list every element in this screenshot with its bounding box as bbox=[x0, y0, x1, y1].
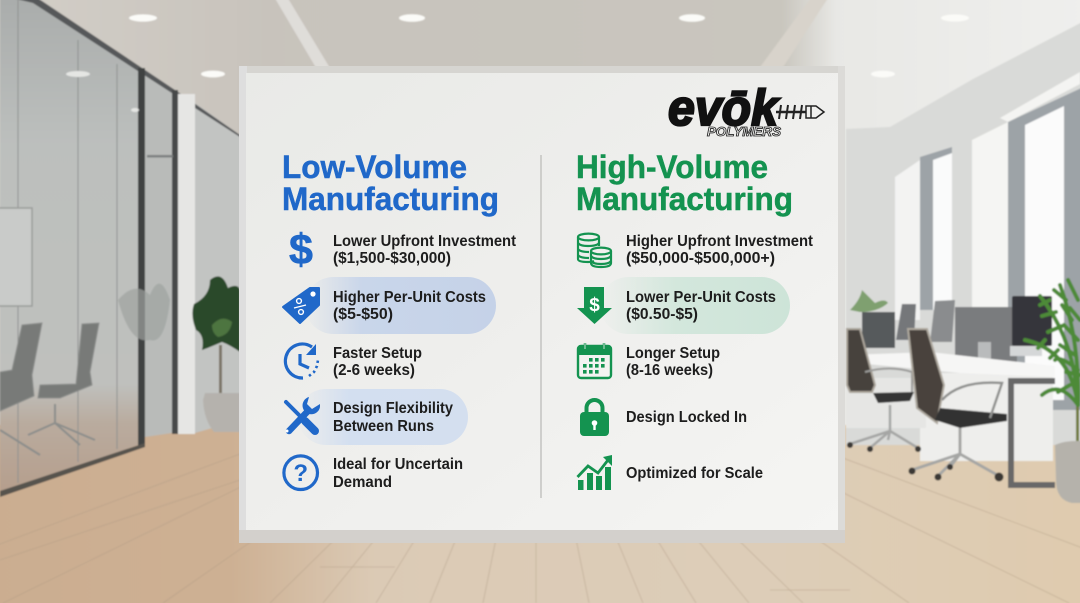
ceiling beams bbox=[273, 0, 830, 78]
floor plank lines bbox=[0, 440, 1080, 603]
left plant bbox=[192, 276, 240, 432]
item: lower upfront investment bbox=[289, 226, 516, 274]
item text: Longer Setup bbox=[626, 345, 720, 362]
highlight pill bbox=[305, 277, 496, 334]
icon: down arrow with dollar bbox=[577, 287, 612, 324]
board face bbox=[246, 73, 838, 530]
reflected plant bbox=[118, 284, 170, 340]
item text: Demand bbox=[333, 474, 392, 491]
ceiling lights bbox=[129, 14, 969, 77]
item text: Ideal for Uncertain bbox=[333, 456, 463, 473]
item: higher per-unit costs bbox=[283, 277, 496, 334]
item text: ($50,000-$500,000+) bbox=[626, 250, 775, 267]
heading: low-volume: Manufacturing bbox=[282, 181, 499, 217]
logo wordmark: evōk bbox=[668, 80, 780, 136]
logo: evok polymers bbox=[668, 80, 824, 139]
office chair near bbox=[908, 329, 1007, 482]
item: longer setup bbox=[578, 343, 720, 379]
highlight pill bbox=[600, 277, 790, 334]
office chair far bbox=[847, 329, 921, 452]
item text: (8-16 weeks) bbox=[626, 362, 713, 379]
icon: price tag bbox=[283, 288, 319, 323]
icon: question mark bbox=[284, 456, 318, 490]
item: higher upfront investment bbox=[578, 233, 813, 267]
item text: Faster Setup bbox=[333, 345, 422, 362]
icon: clock with arrow bbox=[285, 344, 318, 378]
desks and monitors bbox=[846, 296, 1055, 485]
item text: Lower Per-Unit Costs bbox=[626, 289, 776, 306]
item text: Design Locked In bbox=[626, 409, 747, 426]
item: ideal for uncertain demand bbox=[284, 456, 463, 491]
logo bolt bbox=[776, 105, 824, 119]
item text: Between Runs bbox=[333, 418, 434, 435]
highlight pill bbox=[298, 389, 468, 445]
heading: high-volume: High-Volume bbox=[576, 149, 768, 185]
icon: down arrow with dollar: $ bbox=[589, 295, 600, 316]
panel: high-volume manufacturing bbox=[576, 149, 813, 490]
column divider bbox=[540, 155, 542, 498]
item text: Lower Upfront Investment bbox=[333, 233, 516, 250]
panel: low-volume manufacturing bbox=[282, 149, 516, 491]
heading: high-volume: Manufacturing bbox=[576, 181, 793, 217]
right wall bbox=[846, 18, 1080, 445]
item: design locked in bbox=[580, 400, 747, 436]
icon: question mark: ? bbox=[293, 460, 308, 487]
icon: wrench and screwdriver bbox=[286, 397, 320, 432]
left glass wall bbox=[0, 0, 240, 497]
reflected chairs in glass bbox=[0, 323, 99, 455]
item text: ($5-$50) bbox=[333, 306, 393, 323]
item text: Higher Per-Unit Costs bbox=[333, 289, 486, 306]
item: optimized for scale bbox=[578, 455, 763, 490]
icon: coin stacks bbox=[578, 234, 611, 267]
item text: Design Flexibility bbox=[333, 400, 453, 417]
logo sub-wordmark: POLYMERS bbox=[707, 125, 782, 139]
item: design flexibility bbox=[286, 389, 468, 445]
item: lower per-unit costs bbox=[577, 277, 790, 334]
item text: ($0.50-$5) bbox=[626, 306, 698, 323]
icon: padlock bbox=[580, 400, 609, 436]
board frame bbox=[239, 66, 845, 543]
item: faster setup bbox=[285, 344, 422, 379]
icon: dollar sign: $ bbox=[289, 226, 313, 274]
small plant bbox=[850, 290, 888, 312]
white column bbox=[178, 94, 195, 434]
item text: (2-6 weeks) bbox=[333, 362, 415, 379]
floor bbox=[0, 425, 1080, 603]
item text: Higher Upfront Investment bbox=[626, 233, 813, 250]
item text: ($1,500-$30,000) bbox=[333, 250, 451, 267]
icon: growth chart bbox=[578, 455, 612, 490]
right plant bbox=[1025, 280, 1080, 503]
item text: Optimized for Scale bbox=[626, 465, 763, 482]
icon: calendar bbox=[578, 343, 611, 378]
heading: low-volume: Low-Volume bbox=[282, 149, 467, 185]
